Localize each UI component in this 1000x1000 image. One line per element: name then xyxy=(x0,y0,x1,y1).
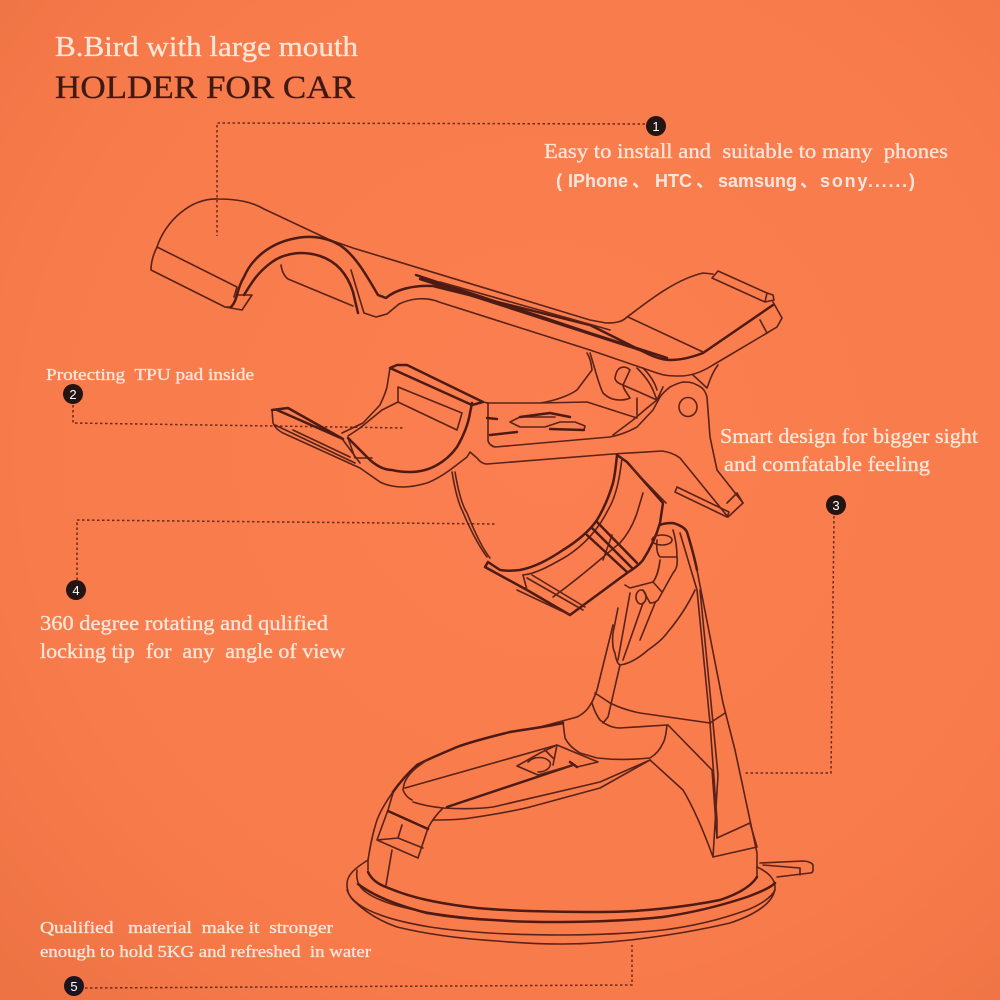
callout 1: easy to install: 、 xyxy=(632,171,650,191)
callout 1: easy to install: 、 xyxy=(696,171,714,191)
title: B.Bird with large mouth xyxy=(55,31,359,63)
title: HOLDER FOR CAR xyxy=(55,70,355,106)
callout 1: easy to install: IPhone xyxy=(568,171,628,191)
callout 1: easy to install: samsung xyxy=(718,171,797,191)
callout 2: TPU pad: Protecting TPU pad inside xyxy=(46,365,254,384)
callout 1: easy to install: Easy to install and suitable to many phones xyxy=(544,139,948,163)
callout 1: easy to install: 1 xyxy=(652,119,660,134)
callout 4: 360 degree: locking tip for any angle of view xyxy=(40,639,346,663)
callout 1: easy to install: HTC xyxy=(655,171,692,191)
lower clip xyxy=(272,353,743,558)
callout 5: material: enough to hold 5KG and refreshed in water xyxy=(40,942,371,961)
callout 5: material: Qualified material make it stronger xyxy=(40,918,333,937)
callout 5: material xyxy=(40,918,632,996)
callout 3: smart design: and comfatable feeling xyxy=(724,452,931,476)
callout 1: easy to install xyxy=(217,116,948,236)
arm xyxy=(540,523,757,877)
callout 5: material: 5 xyxy=(70,979,78,994)
title xyxy=(55,31,359,106)
callout 1: easy to install: 、 xyxy=(800,171,818,191)
callout 4: 360 degree xyxy=(40,520,495,663)
suction base dome xyxy=(368,723,650,885)
ball ring xyxy=(485,455,666,615)
callout 1: easy to install: ( xyxy=(556,171,562,191)
callout 4: 360 degree: 360 degree rotating and qulified xyxy=(40,611,329,635)
callout 1: easy to install: sony......) xyxy=(820,171,915,191)
callout 3: smart design: Smart design for bigger sight xyxy=(720,424,978,448)
callout 2: TPU pad xyxy=(46,365,405,428)
callout 2: TPU pad: 2 xyxy=(69,387,77,402)
top clip xyxy=(151,199,782,376)
illustration: car holder line drawing xyxy=(151,199,813,944)
callout 4: 360 degree: 4 xyxy=(72,583,80,598)
suction cup rim xyxy=(347,860,813,944)
callout 3: smart design: 3 xyxy=(832,498,840,513)
callout 3: smart design xyxy=(720,424,978,773)
